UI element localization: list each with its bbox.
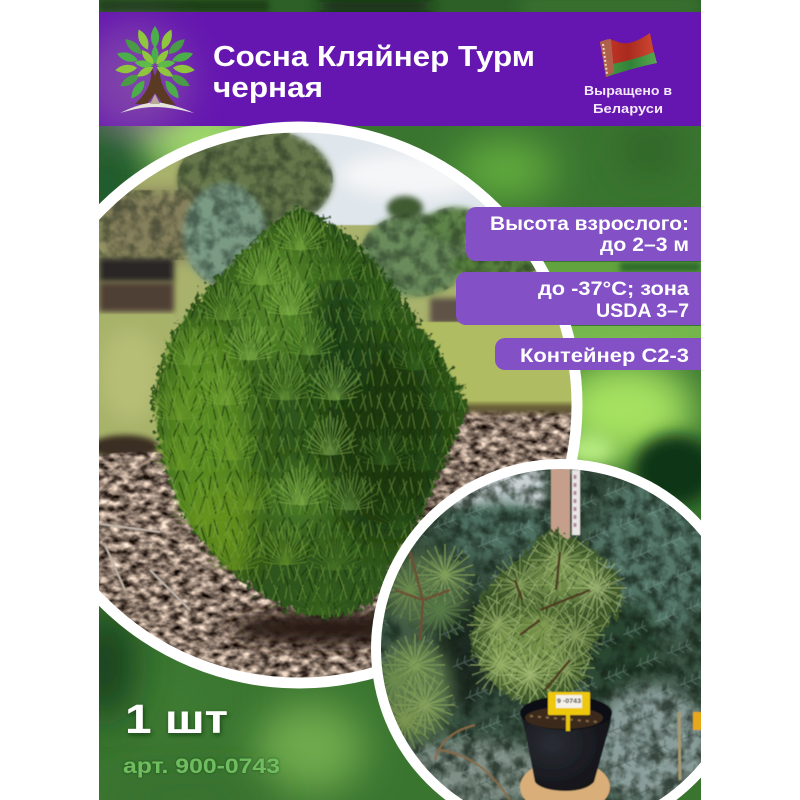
icon: Belarus flag xyxy=(600,33,657,77)
sawdust mound xyxy=(519,768,611,800)
pine crown shading and needles xyxy=(152,208,466,618)
photo: mature pine on mulch xyxy=(99,132,572,678)
pine needle tufts xyxy=(150,206,468,615)
yellow plant tag xyxy=(548,692,590,731)
wooden stake and measuring tape xyxy=(551,468,580,543)
callout: frost hardiness xyxy=(456,272,701,325)
callout: mature height xyxy=(466,207,701,261)
header banner xyxy=(80,12,701,135)
yellow plant tag: 9 -0743 xyxy=(557,698,581,705)
callout: mature height: Высота взрослого: xyxy=(490,214,689,235)
black plastic pot xyxy=(520,696,612,791)
pine silhouette xyxy=(153,208,468,618)
background trees xyxy=(91,122,579,459)
callout: container size: Контейнер С2-3 xyxy=(520,346,689,367)
panel: large photo of pine in white round frame xyxy=(99,122,582,688)
grown in Belarus caption: Выращено в xyxy=(584,84,672,98)
article number: арт. 900-0743 xyxy=(123,755,280,778)
callout: container size xyxy=(495,338,701,370)
title: черная xyxy=(213,72,323,104)
infographic canvas xyxy=(99,0,701,800)
sky xyxy=(289,132,486,226)
mulch ground xyxy=(99,401,572,678)
left pine branches xyxy=(381,543,476,750)
white circle frame small xyxy=(371,459,701,800)
spruce background xyxy=(370,460,710,800)
callout: frost hardiness: до -37°С; зона xyxy=(538,279,689,300)
callout: mature height: до 2–3 м xyxy=(600,235,689,256)
quantity label: 1 шт xyxy=(125,696,228,742)
white circle frame xyxy=(99,122,582,688)
icon: company tree logo xyxy=(115,26,195,113)
grown in Belarus caption: Беларуси xyxy=(593,102,663,116)
young pine crown xyxy=(465,525,630,710)
panel: small photo of potted pine in white round frame xyxy=(371,459,701,800)
callout: frost hardiness: USDA 3–7 xyxy=(596,301,689,322)
title: Сосна Кляйнер Турм xyxy=(213,41,535,73)
photo: young pine in pot xyxy=(365,460,710,800)
